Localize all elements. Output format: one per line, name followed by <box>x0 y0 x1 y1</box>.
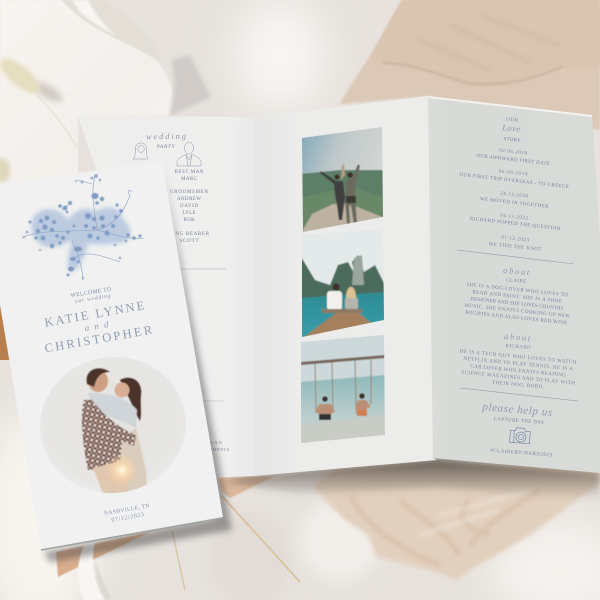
couple names: and <box>84 319 110 333</box>
timeline: OUR FIRST TRIP OVERSEAS - TO GREECE <box>459 173 569 190</box>
kraft envelope <box>0 295 275 577</box>
about richard: NETFLIX AND TO PLAY TENNIS. HE IS A <box>463 357 573 372</box>
heading: wedding party <box>146 131 186 150</box>
closing text <box>205 440 229 452</box>
welcome text: our wedding <box>75 293 111 305</box>
about claire: READ AND PAINT. SHE IS A SHOE <box>472 290 562 305</box>
burlap fabric bottom right <box>313 465 600 580</box>
burlap fabric top right <box>340 0 600 130</box>
timeline: OUR AWKWARD FIRST DATE <box>476 154 550 167</box>
closing text: AND <box>210 440 222 445</box>
photo: couple on rock <box>302 127 383 232</box>
party names: BEST MAN <box>174 170 204 175</box>
heading: our love story: Love <box>501 122 521 134</box>
location and date: 07/12/2023 <box>111 512 145 524</box>
heading: wedding party: PARTY <box>157 145 175 150</box>
people <box>315 393 371 420</box>
timeline: 02.06.2018 <box>499 149 528 157</box>
welcome text: WELCOME TO <box>70 287 112 299</box>
location and date: NASHVILLE, TN <box>104 503 150 517</box>
dried bunny tail grass <box>0 53 77 182</box>
timeline: WE MOVED IN TOGETHER <box>479 197 549 210</box>
timeline: RICHARD POPPED THE QUESTION <box>470 217 561 232</box>
about richard <box>460 331 577 390</box>
icon: camera <box>510 427 531 444</box>
icon: bride <box>133 143 148 159</box>
open booklet <box>78 96 600 478</box>
about claire: MUSIC. SHE ENJOYS COOKING UP NEW <box>464 303 570 320</box>
party names: GROOMSMEN <box>170 190 208 195</box>
couple names: CHRISTOPHER <box>43 323 154 355</box>
heading: wedding party: wedding <box>146 131 186 141</box>
location and date <box>104 503 150 524</box>
about claire <box>464 265 570 326</box>
woman <box>120 378 141 421</box>
panel: wedding party <box>78 116 255 478</box>
man <box>88 370 108 392</box>
party names: RING BEARER <box>169 232 210 237</box>
about richard: THEIR DOG, BOBO. <box>492 381 544 390</box>
party names: ROB <box>184 218 195 223</box>
people <box>322 283 362 313</box>
party names: DAVID <box>180 204 198 209</box>
party names: ANDREW <box>177 197 201 202</box>
timeline: 06.09.2019 <box>498 170 528 178</box>
booklet shadow <box>222 458 600 500</box>
panel: photo strip <box>254 96 437 476</box>
about richard: RICHARD <box>505 344 531 351</box>
timeline: 24.12.2020 <box>500 192 529 200</box>
heading: our love story: OUR <box>506 117 519 124</box>
please help us: please help us <box>481 401 553 419</box>
about claire: RECIPIES AND ALSO LOVES RED WINE. <box>465 311 569 326</box>
party names <box>169 170 210 244</box>
party names: LYLE <box>182 211 196 216</box>
about richard: SCIENCE MAGAZINES AND TO PLAY WITH <box>461 371 575 386</box>
timeline <box>459 149 569 253</box>
couple names <box>43 298 154 355</box>
panel: our story and about <box>428 96 600 473</box>
about claire: CLAIRE <box>506 278 526 285</box>
timeline: 04.13.2022 <box>500 214 529 222</box>
closing text: MOMENTS <box>205 447 229 452</box>
about richard: about <box>504 331 531 343</box>
party names: MARC <box>181 177 198 182</box>
heading: our love story <box>501 117 521 144</box>
party names: SCOTT <box>180 239 198 244</box>
about richard: CAR LOVER WHO ENJOYS READING <box>470 364 566 379</box>
photo: swings at sea <box>300 333 386 445</box>
heading: our love story: STORY <box>503 137 521 144</box>
couple names: KATIE LYNNE <box>43 298 146 330</box>
floral bouquet <box>22 174 144 280</box>
timeline: 07.12.2023 <box>501 236 530 244</box>
about richard: HE IS A TECH GUY WHO LOVES TO WATCH <box>460 349 577 366</box>
photo: embracing couple <box>40 357 186 494</box>
white ribbon <box>0 0 211 185</box>
about claire: DESIGNER AND SHE LOVES COUNTRY <box>470 297 564 312</box>
people <box>320 164 360 225</box>
hashtag: #CLAIRERICHARD2023 <box>490 449 553 458</box>
photo: longtail boat <box>302 254 384 337</box>
wooden sticks <box>172 495 300 590</box>
icon: groom <box>177 142 201 166</box>
welcome text <box>70 287 112 305</box>
about claire: SHE IS A DOG LOVER WHO LOVES TO <box>466 283 568 298</box>
ribbon bottom <box>78 542 112 600</box>
front card <box>0 161 223 550</box>
timeline: WE TIED THE KNOT <box>488 242 542 253</box>
front card shadow <box>44 165 232 562</box>
please help us: CAPTURE THE DAY <box>493 417 545 426</box>
about claire: about <box>503 265 530 277</box>
